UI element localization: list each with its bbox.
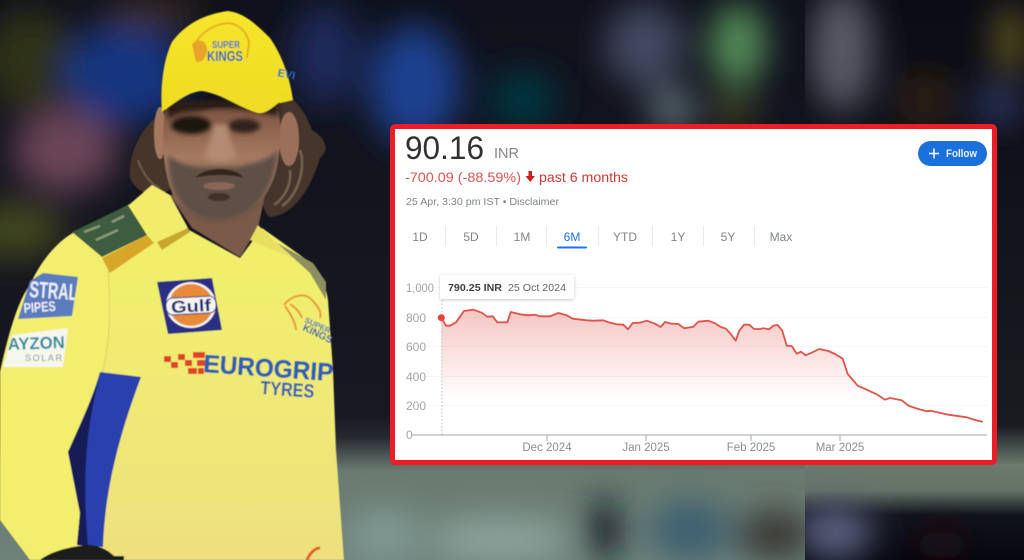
y axis labels: 200 [406, 399, 426, 413]
cap logo: SUPER [212, 40, 241, 51]
Eurogrip Tyres sponsor [164, 350, 334, 403]
time range tabs: 1M [514, 230, 530, 244]
x axis labels: Jan 2025 [622, 442, 670, 454]
timestamp: 25 Apr, 3:30 pm IST • Disclaimer [406, 196, 559, 208]
y axis labels: 1,000 [406, 281, 434, 295]
line chart [406, 275, 987, 454]
change period: past 6 months [539, 170, 628, 185]
wrist glove [40, 545, 124, 560]
collar right [250, 225, 292, 258]
tooltip [440, 275, 574, 299]
currency: INR [494, 145, 519, 162]
x axis labels: Mar 2025 [816, 442, 864, 454]
follow button [918, 141, 987, 166]
Astral Pipes sleeve patch [18, 273, 78, 319]
x axis labels: Feb 2025 [727, 442, 775, 454]
cap side sponsor: EVI [276, 67, 296, 83]
neck [170, 195, 265, 257]
Super Kings chest logo [284, 295, 334, 346]
Rayzon Solar sleeve patch [3, 328, 68, 367]
panel: stock chart card [392, 126, 994, 462]
x axis labels: Dec 2024 [522, 442, 572, 454]
sleeve [0, 270, 110, 560]
y axis labels: 400 [406, 370, 426, 384]
player photo illustration [0, 11, 344, 560]
time range tabs: YTD [613, 230, 637, 244]
ears [154, 107, 299, 166]
face [163, 100, 280, 220]
y axis labels [406, 281, 434, 442]
gold trim [102, 235, 154, 273]
baseline and ticks [411, 435, 987, 441]
camo shoulder [72, 205, 147, 257]
stock price: 90.16 [405, 130, 484, 166]
time range tabs: 1Y [671, 230, 685, 244]
time range tabs [412, 226, 792, 248]
Gulf badge [157, 278, 222, 334]
Rayzon Solar sleeve patch: SOLAR [25, 353, 62, 363]
blurred stadium background, left section [0, 0, 813, 560]
Eurogrip Tyres sponsor: TYRES [260, 378, 315, 403]
collar left [130, 185, 188, 242]
price line [441, 310, 983, 422]
jersey body [0, 185, 344, 560]
blurred stadium background, right section [797, 0, 1024, 560]
start marker line [441, 300, 443, 435]
hair [130, 92, 326, 217]
price change: -700.09 (-88.59%) [405, 170, 521, 185]
Super Kings chest logo: SUPER [303, 316, 332, 336]
y axis labels: 600 [406, 340, 426, 354]
Super Kings chest logo: KINGS [301, 323, 334, 346]
Astral Pipes sleeve patch: STRAL [29, 276, 78, 305]
cap [161, 11, 296, 113]
time range tabs: 6M [564, 230, 580, 244]
cap logo: KINGS [207, 48, 243, 65]
tooltip: 25 Oct 2024 [508, 282, 566, 294]
icon: down arrow [526, 171, 535, 182]
tooltip: 790.25 INR [448, 282, 502, 294]
time range tabs: Max [770, 230, 792, 244]
Astral Pipes sleeve patch: PIPES [23, 298, 56, 316]
time range tabs: 1D [412, 230, 428, 244]
time range tabs: 5D [463, 230, 479, 244]
Rayzon Solar sleeve patch: AYZON [7, 333, 65, 354]
time range tabs: 5Y [721, 230, 735, 244]
y axis labels: 0 [406, 428, 413, 442]
hem accent [307, 548, 320, 560]
x axis labels [522, 442, 864, 454]
Gulf badge: Gulf [171, 296, 212, 317]
follow button: Follow [946, 148, 977, 160]
y axis labels: 800 [406, 311, 426, 325]
start point marker [438, 314, 445, 321]
price area fill [441, 310, 909, 435]
blue side panel [68, 372, 141, 547]
cap logo [192, 23, 249, 65]
Eurogrip Tyres sponsor: EUROGRIP [203, 350, 334, 387]
